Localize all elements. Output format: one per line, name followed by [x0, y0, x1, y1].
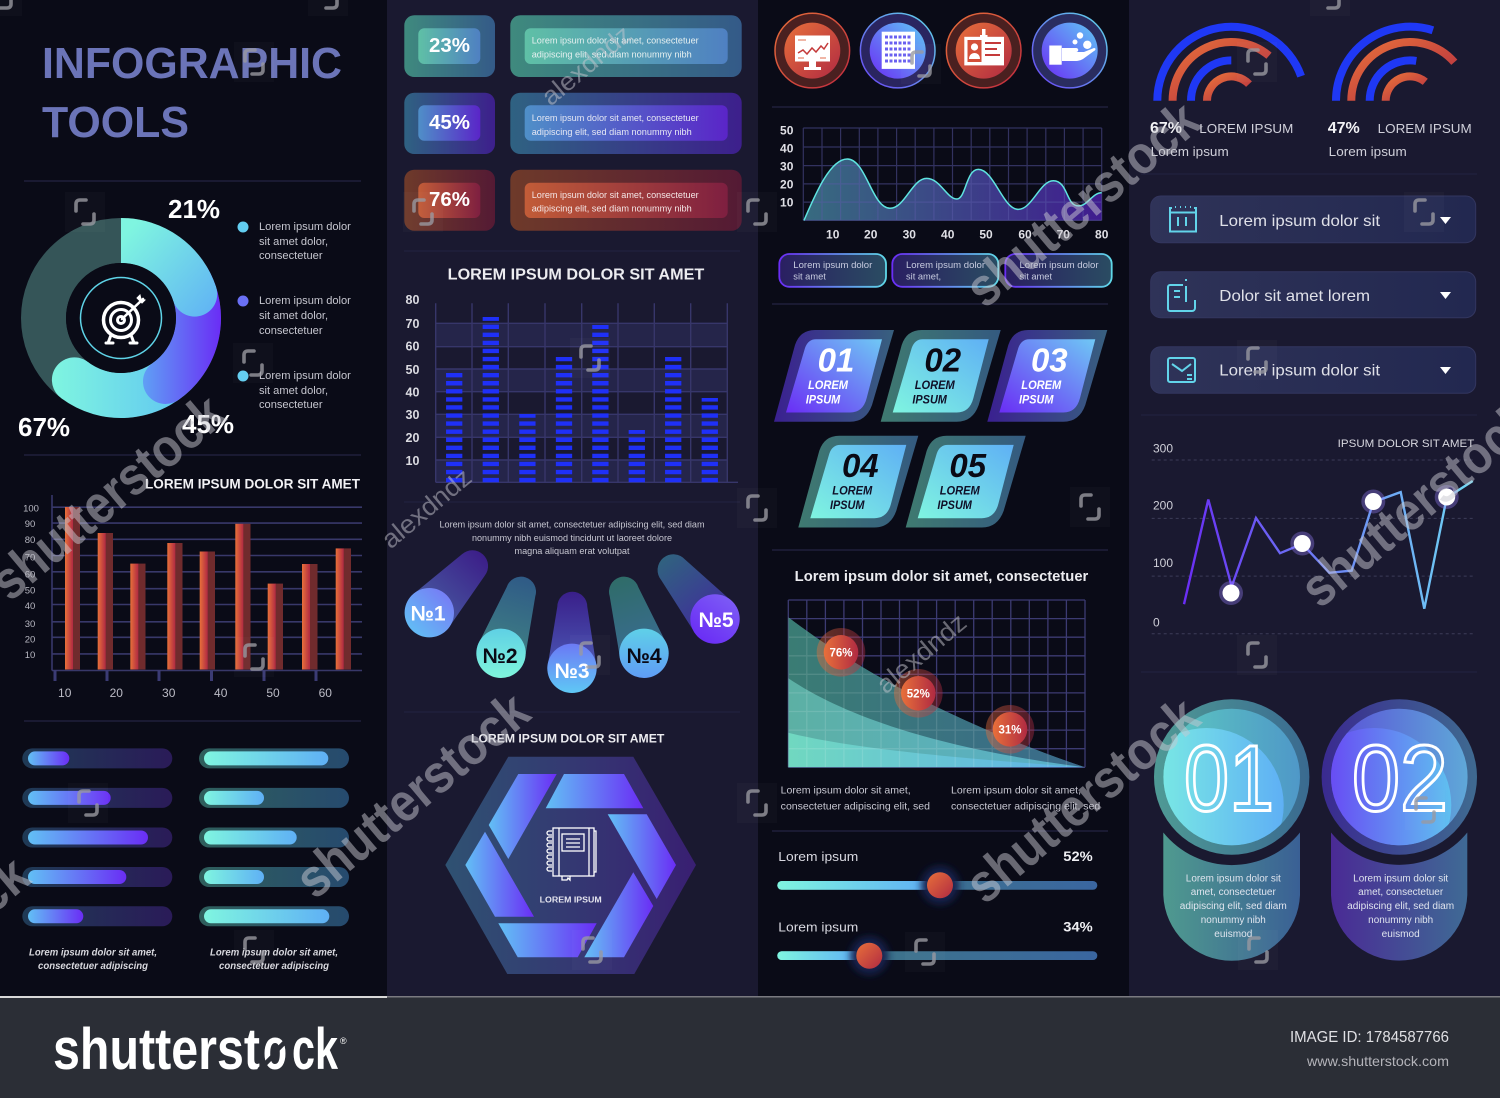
- card 03: IPSUM: [1019, 392, 1054, 406]
- donut legend: consectetuer: [259, 399, 323, 411]
- line chart: 300: [1153, 442, 1173, 456]
- card 05: 05: [949, 447, 987, 484]
- website: www.shutterstock.com: [1306, 1053, 1449, 1069]
- row 76%: 76%: [429, 188, 470, 211]
- donut legend: Lorem ipsum dolor: [259, 295, 351, 307]
- bar chart x labels: 40: [214, 686, 228, 700]
- donut percent labels: 67%: [18, 412, 70, 442]
- capsule №3: [547, 592, 597, 693]
- layered chart captions: Lorem ipsum dolor sit amet,: [781, 786, 911, 796]
- dropdown: calendar: [1151, 196, 1476, 243]
- bar chart x labels: 10: [58, 686, 72, 700]
- layered chart captions: Lorem ipsum dolor sit amet,: [951, 786, 1081, 796]
- progress bar captions: consectetuer adipiscing: [219, 961, 329, 972]
- area chart x labels: 10: [826, 228, 840, 242]
- bar chart: [23, 495, 362, 700]
- circle card 01: nonummy nibh: [1201, 915, 1266, 926]
- marker 31%: [986, 705, 1034, 754]
- row 76%: [404, 170, 742, 231]
- area chart x labels: 80: [1095, 228, 1109, 242]
- card 03: 03: [1031, 342, 1068, 378]
- equaliser y labels: 40: [406, 386, 419, 400]
- row 23%: Lorem ipsum dolor sit amet, consectetuer: [532, 34, 699, 46]
- bar chart y labels: 90: [25, 519, 35, 530]
- row 23%: [404, 15, 742, 77]
- hexagon diagram: LOREM IPSUM: [540, 896, 602, 905]
- layered area chart heading: Lorem ipsum dolor sit amet, consectetuer: [795, 569, 1089, 585]
- numbered cards: [774, 330, 1107, 528]
- circle card 01: [1154, 699, 1310, 961]
- icon: hand with coins: [1032, 13, 1107, 88]
- slider 34%: Lorem ipsum: [778, 920, 858, 935]
- line chart: 0: [1153, 616, 1160, 630]
- card 02: LOREM: [915, 378, 956, 392]
- marker 76%: [817, 628, 865, 677]
- equaliser y labels: 80: [406, 293, 419, 307]
- capsule №5: [658, 554, 740, 644]
- watermark: alexdndz: alexdndz: [375, 462, 477, 554]
- arc gauge 47%: LOREM IPSUM: [1378, 121, 1472, 136]
- capsule №5: №5: [698, 609, 734, 632]
- bar chart y labels: 100: [23, 504, 39, 514]
- bar chart y labels: 70: [25, 552, 35, 564]
- bar chart y labels: 20: [25, 634, 35, 646]
- circle card 01: adipiscing elit, sed diam: [1180, 901, 1287, 912]
- capsule №2: [476, 577, 536, 678]
- watermark: shutterstock: shutterstock: [954, 89, 1212, 319]
- donut legend: Lorem ipsum dolor: [259, 370, 351, 382]
- circle card 01: Lorem ipsum dolor sit: [1186, 874, 1281, 884]
- area chart: [780, 124, 1109, 242]
- card 05: [906, 436, 1026, 528]
- bar chart y labels: 10: [25, 650, 35, 661]
- slider 52%: Lorem ipsum: [778, 849, 858, 864]
- equaliser y labels: 30: [406, 408, 419, 422]
- circle card 02: euismod: [1382, 929, 1420, 940]
- row 23%: adipiscing elit, sed diam nonummy nibh: [532, 48, 692, 60]
- capsule №2: №2: [482, 645, 518, 668]
- icon row: [775, 13, 1107, 88]
- caption pills: Lorem ipsum dolor: [1020, 260, 1098, 270]
- circle card 01: amet, consectetuer: [1191, 887, 1277, 898]
- slider 52%: 52%: [1063, 848, 1093, 864]
- bar chart x labels: 60: [319, 686, 332, 700]
- progress bar captions: [29, 948, 338, 972]
- row 45%: adipiscing elit, sed diam nonummy nibh: [532, 126, 692, 137]
- card 03: [987, 330, 1107, 422]
- area chart x labels: 60: [1018, 228, 1032, 242]
- icon: document list: [860, 13, 935, 88]
- equaliser y labels: 70: [406, 317, 419, 331]
- card 02: 02: [924, 342, 962, 378]
- bar chart y labels: 30: [25, 619, 35, 630]
- circle card 02: Lorem ipsum dolor sit: [1353, 874, 1448, 884]
- area chart x labels: 50: [979, 228, 993, 242]
- arc gauge 67%: 67%: [1150, 120, 1182, 137]
- card 03: LOREM: [1021, 378, 1062, 392]
- arc gauge 67%: Lorem ipsum: [1151, 145, 1229, 159]
- circle card 02: nonummy nibh: [1368, 915, 1433, 926]
- card 04: LOREM: [832, 484, 873, 498]
- shutterstock logo: o: [263, 1017, 287, 1082]
- area chart y labels: 20: [780, 178, 794, 192]
- title: [42, 39, 342, 147]
- arc gauge 47%: 47%: [1328, 120, 1360, 137]
- arc gauge 67%: LOREM IPSUM: [1199, 121, 1293, 136]
- donut percent labels: 21%: [168, 194, 220, 224]
- bar chart y labels: 80: [25, 535, 35, 546]
- marker 31%: 31%: [998, 724, 1022, 736]
- bar chart x labels: 30: [162, 686, 176, 700]
- dropdown: calendar: Lorem ipsum dolor sit: [1219, 213, 1381, 230]
- bar chart y labels: 40: [25, 601, 35, 612]
- numbered capsules: [405, 550, 740, 693]
- progress bars: violet: [22, 748, 172, 926]
- title: INFOGRAPHIC: [42, 39, 342, 88]
- equaliser y labels: 10: [406, 454, 419, 468]
- percent callout rows: [404, 15, 742, 231]
- marker 52%: 52%: [907, 688, 930, 700]
- area chart y labels: 30: [780, 160, 794, 174]
- circle card 02: 02: [1352, 726, 1448, 830]
- area chart y labels: 40: [780, 142, 794, 156]
- card 02: [881, 330, 1001, 422]
- watermark: shutterstock: shutterstock: [954, 685, 1212, 915]
- circle card 02: [1322, 699, 1477, 961]
- area chart x labels: 70: [1057, 228, 1070, 242]
- circle card 02: adipiscing elit, sed diam: [1347, 901, 1454, 912]
- equaliser bar chart: [406, 293, 738, 482]
- card 01: LOREM: [808, 378, 849, 392]
- caption pills: [779, 254, 1112, 287]
- icon: id card: [946, 13, 1021, 88]
- card 04: IPSUM: [830, 498, 865, 512]
- circle card 02: amet, consectetuer: [1358, 887, 1444, 898]
- equaliser y labels: 50: [406, 363, 419, 377]
- area chart x labels: 20: [864, 228, 878, 242]
- equaliser y labels: [406, 293, 419, 468]
- shutterstock logo: ®: [340, 1036, 347, 1046]
- marker 52%: [894, 669, 943, 718]
- watermark: shutterstock: shutterstock: [284, 680, 542, 910]
- progress bar captions: Lorem ipsum dolor sit amet,: [29, 948, 157, 958]
- line chart markers: [1219, 485, 1459, 605]
- image id: IMAGE ID: 1784587766: [1290, 1029, 1449, 1046]
- progress bars: teal: [199, 748, 349, 926]
- arc gauge 67%: [1150, 27, 1301, 159]
- paragraph above numbered capsules: magna aliquam erat volutpat: [514, 545, 630, 556]
- watermark: alexdndz: [375, 19, 972, 699]
- bar chart y labels: [23, 504, 39, 661]
- hexagon heading: LOREM IPSUM DOLOR SIT AMET: [471, 732, 665, 746]
- area chart y labels: 50: [780, 124, 794, 138]
- capsule №4: [609, 577, 669, 678]
- capsule №1: №1: [410, 602, 446, 626]
- card 01: IPSUM: [806, 392, 841, 406]
- donut percent labels: 45%: [182, 409, 234, 439]
- section dividers: [24, 107, 1477, 831]
- bar chart y labels: 60: [25, 570, 35, 580]
- arc gauge 47%: [1328, 27, 1472, 159]
- caption pills: sit amet,: [906, 272, 941, 282]
- icon: monitor chart: [775, 13, 850, 88]
- bar chart x labels: [58, 686, 332, 700]
- area chart y labels: [780, 124, 794, 210]
- equaliser y labels: 20: [406, 431, 419, 445]
- bar chart x labels: 20: [110, 686, 123, 700]
- row 23%: 23%: [429, 34, 470, 57]
- shutterstock logo: ck: [292, 1017, 339, 1082]
- layered area chart: [788, 600, 1085, 767]
- bar chart x labels: 50: [266, 686, 280, 700]
- area chart x labels: 30: [903, 228, 916, 242]
- row 45%: 45%: [429, 111, 470, 134]
- layered chart captions: [781, 786, 1101, 812]
- bar chart heading: LOREM IPSUM DOLOR SIT AMET: [145, 476, 360, 492]
- donut legend: consectetuer: [259, 250, 323, 262]
- hexagon diagram: [445, 757, 696, 974]
- paragraph above numbered capsules: [440, 518, 705, 556]
- caption pills: sit amet: [1020, 272, 1052, 282]
- card 02: IPSUM: [912, 392, 948, 406]
- line chart: 200: [1153, 498, 1173, 512]
- dropdown: mail: Lorem ipsum dolor sit: [1219, 362, 1381, 380]
- slider 52%: [777, 848, 1097, 904]
- area chart x labels: [826, 228, 1109, 242]
- layered chart captions: consectetuer adipiscing elit, sed: [781, 802, 930, 812]
- donut legend: Lorem ipsum dolor: [259, 221, 351, 233]
- card 05: IPSUM: [937, 498, 973, 512]
- circle card 01: euismod: [1214, 929, 1252, 940]
- donut chart: [44, 240, 217, 404]
- icon: notebook: [547, 828, 596, 880]
- row 76%: Lorem ipsum dolor sit amet, consectetuer: [532, 189, 699, 200]
- progress bar captions: Lorem ipsum dolor sit amet,: [210, 948, 338, 958]
- bar chart y labels: 50: [25, 586, 35, 596]
- dropdown: mail: [1151, 347, 1476, 393]
- line chart: [1152, 438, 1475, 634]
- card 04: [798, 436, 918, 528]
- row 45%: Lorem ipsum dolor sit amet, consectetuer: [532, 112, 699, 123]
- card 05: LOREM: [940, 484, 981, 498]
- circle card 01: 01: [1184, 726, 1274, 830]
- watermark: alexdndz: alexdndz: [535, 19, 637, 111]
- footer bar: [0, 996, 1500, 1098]
- card 01: [774, 330, 894, 422]
- row 76%: adipiscing elit, sed diam nonummy nibh: [532, 202, 692, 214]
- slider 34%: 34%: [1063, 919, 1093, 935]
- progress bar captions: consectetuer adipiscing: [38, 961, 148, 972]
- equaliser y labels: 60: [406, 340, 419, 354]
- dropdown: document: Dolor sit amet lorem: [1219, 288, 1370, 305]
- area chart x labels: 40: [941, 228, 955, 242]
- caption pills: Lorem ipsum dolor: [906, 260, 985, 270]
- area chart y labels: 10: [780, 196, 794, 210]
- watermark: alexdndz: alexdndz: [870, 607, 972, 699]
- caption pills: sit amet: [793, 272, 826, 282]
- dropdown: document: [1151, 272, 1476, 318]
- caption pills: Lorem ipsum dolor: [793, 260, 872, 270]
- equaliser chart heading: LOREM IPSUM DOLOR SIT AMET: [448, 266, 705, 284]
- card 01: 01: [818, 342, 854, 378]
- line chart: IPSUM DOLOR SIT AMET: [1338, 438, 1475, 450]
- donut legend: sit amet dolor,: [259, 385, 328, 397]
- donut legend: sit amet dolor,: [259, 310, 328, 322]
- donut legend: [238, 221, 351, 411]
- capsule №3: №3: [554, 660, 590, 683]
- line chart: 100: [1153, 556, 1173, 570]
- layered chart captions: consectetuer adipiscing elit, sed: [951, 802, 1101, 812]
- card 04: 04: [842, 447, 879, 484]
- capsule №4: №4: [626, 645, 662, 668]
- paragraph above numbered capsules: nonummy nibh euismod tincidunt ut laoreet dolore: [472, 532, 672, 543]
- title: TOOLS: [42, 98, 189, 147]
- marker 76%: 76%: [829, 648, 853, 660]
- capsule №1: [405, 550, 488, 637]
- icon: target: [104, 295, 145, 343]
- slider 34%: [777, 919, 1097, 975]
- row 45%: [404, 93, 742, 154]
- donut percent labels: [18, 194, 234, 442]
- shutterstock logo: shutterst: [53, 1017, 260, 1082]
- donut legend: consectetuer: [259, 325, 323, 337]
- donut legend: sit amet dolor,: [259, 236, 328, 248]
- arc gauge 47%: Lorem ipsum: [1329, 145, 1407, 159]
- paragraph above numbered capsules: Lorem ipsum dolor sit amet, consectetuer adipiscing elit, sed diam: [440, 518, 705, 530]
